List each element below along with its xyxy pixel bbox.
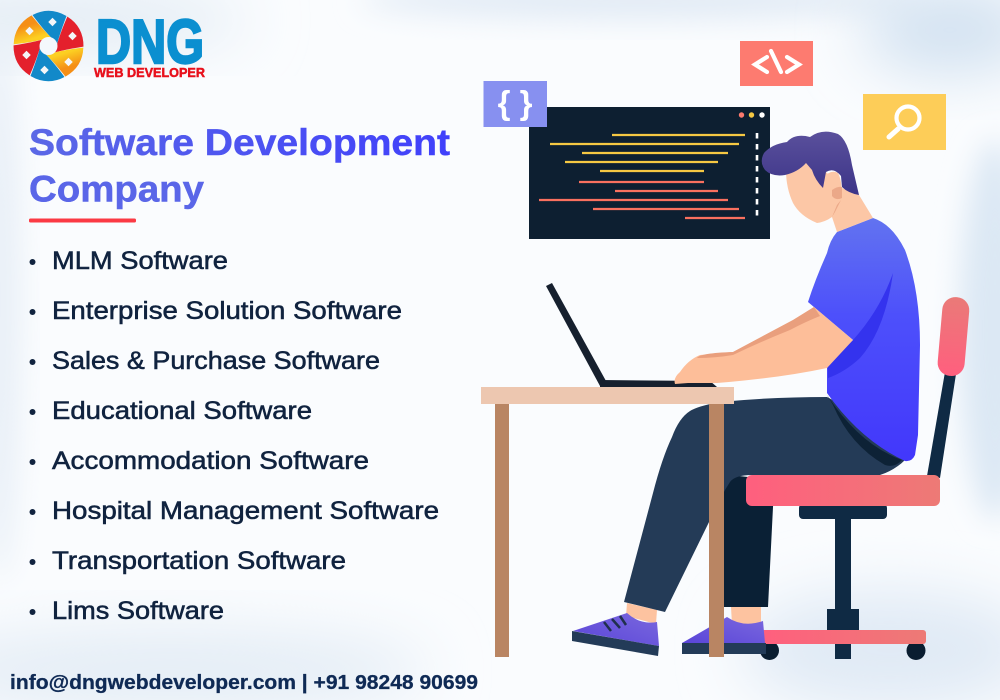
icon: curly braces tile: { } bbox=[498, 84, 533, 121]
icon: logo swirl bbox=[9, 11, 88, 81]
icon: code tag tile bbox=[740, 41, 813, 86]
list item: Hospital Management Software bbox=[52, 497, 439, 525]
chair column and base bbox=[760, 504, 926, 660]
illustration: chair bbox=[760, 296, 970, 660]
shirt shadow on trousers bbox=[827, 395, 902, 466]
illustration: chair seat bbox=[746, 475, 940, 506]
illustration: desk bbox=[481, 387, 734, 657]
trousers bbox=[624, 397, 905, 612]
title: Company bbox=[29, 168, 204, 210]
neck and face bbox=[786, 158, 873, 232]
ear bbox=[824, 172, 842, 199]
laptop bbox=[546, 283, 717, 387]
list item: MLM Software bbox=[52, 247, 228, 275]
footer contact line: info@dngwebdeveloper.com | +91 98248 90699 bbox=[10, 672, 478, 694]
neck shadow bbox=[832, 200, 841, 217]
chair back pad bbox=[937, 296, 970, 377]
logo bbox=[9, 8, 206, 81]
back leg bbox=[720, 475, 775, 607]
list item: Lims Software bbox=[52, 597, 224, 625]
logo tagline: WEB DEVELOPER bbox=[94, 65, 206, 80]
desk leg left bbox=[495, 404, 509, 657]
shirt sleeve shadow bbox=[828, 273, 893, 378]
icon: magnifier tile bbox=[863, 94, 946, 150]
list item: Educational Software bbox=[52, 397, 312, 425]
desk top bbox=[481, 387, 734, 404]
arm bbox=[675, 307, 853, 384]
back ankle bbox=[731, 607, 761, 624]
title underline bbox=[29, 218, 136, 222]
code window panel bbox=[529, 107, 770, 239]
icon: curly braces tile bbox=[484, 81, 547, 127]
bulleted software list bbox=[30, 247, 439, 625]
back shoe bbox=[682, 617, 766, 654]
hair bbox=[762, 132, 859, 195]
code lines: yellow bbox=[550, 135, 745, 171]
front shoe bbox=[572, 613, 659, 656]
arm shadow bbox=[697, 307, 820, 358]
desk leg right bbox=[709, 404, 724, 657]
list item: Enterprise Solution Software bbox=[52, 297, 402, 325]
front ankle bbox=[626, 603, 657, 624]
logo wordmark: DNG bbox=[96, 8, 204, 77]
title: Software Development bbox=[29, 122, 450, 163]
shirt bbox=[808, 218, 920, 461]
list item: Accommodation Software bbox=[52, 447, 369, 475]
code lines: red bbox=[539, 182, 745, 218]
list item: Sales & Purchase Software bbox=[52, 347, 380, 375]
illustration: person bbox=[546, 132, 920, 656]
chair foot bar bbox=[761, 630, 926, 644]
chair back post bbox=[927, 372, 956, 478]
list item: Transportation Software bbox=[52, 547, 346, 575]
title bbox=[29, 122, 450, 210]
